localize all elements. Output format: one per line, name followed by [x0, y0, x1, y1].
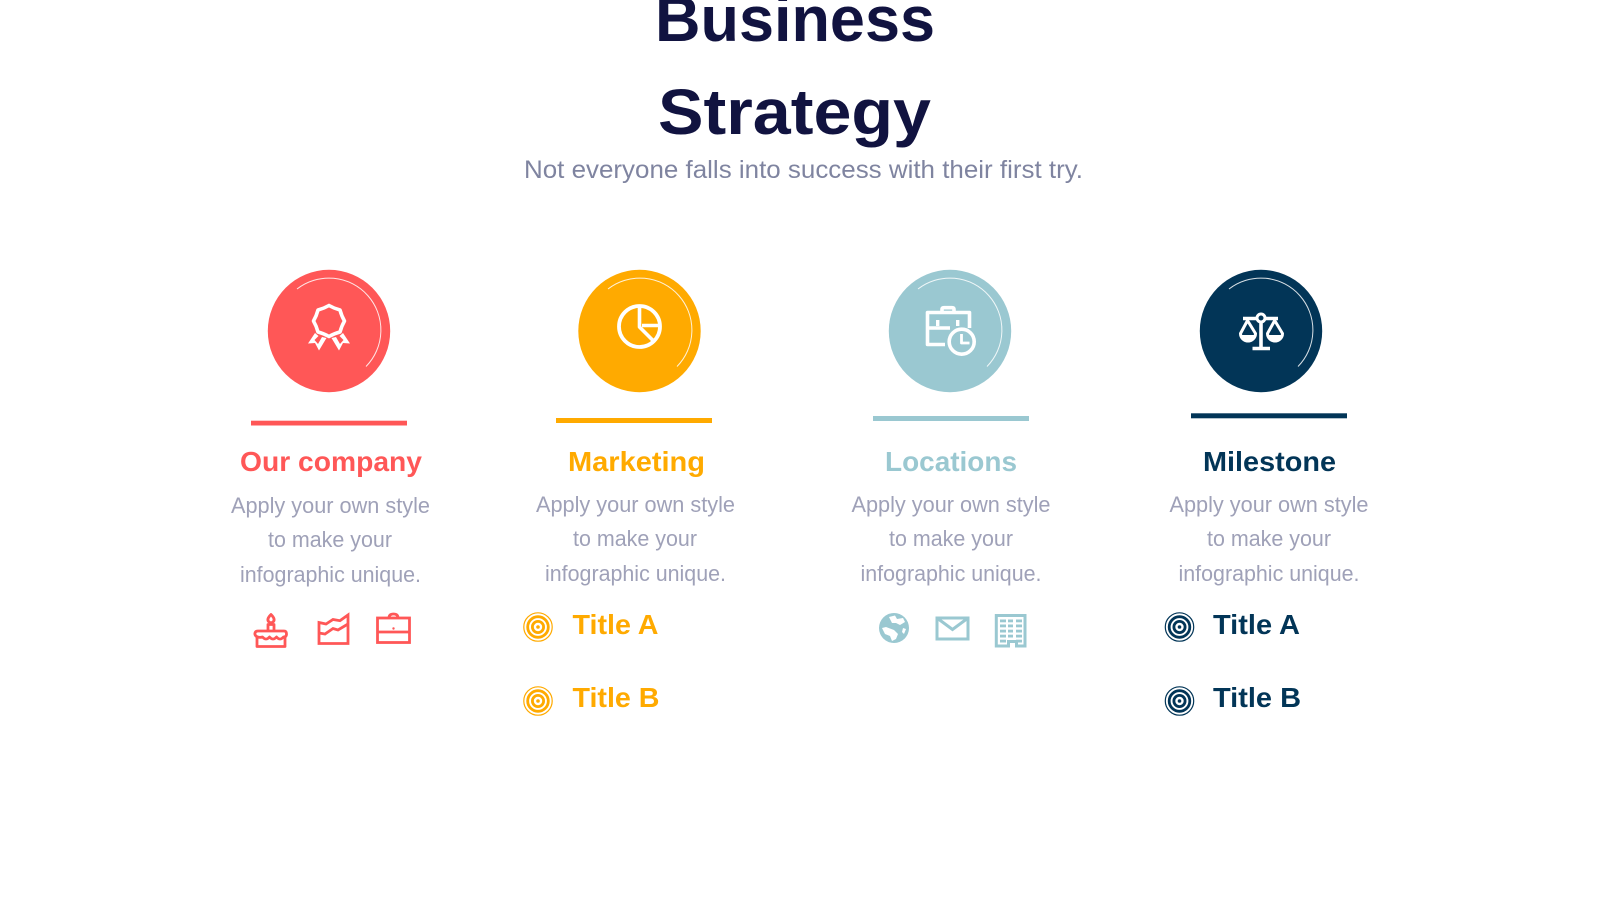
description: to make your [268, 527, 392, 552]
underline [251, 421, 407, 426]
heading: Our company [240, 446, 422, 477]
panel: milestone [1165, 270, 1368, 715]
panel: our company [231, 270, 430, 646]
description: infographic unique. [860, 561, 1042, 586]
icon: globe [879, 613, 909, 643]
list item: title B: Title B [572, 682, 660, 713]
description [536, 492, 735, 586]
description: infographic unique. [545, 561, 726, 586]
icon: balance scale in navy circle [1200, 270, 1322, 392]
underline [1191, 413, 1347, 418]
icon: cake [255, 614, 286, 646]
description: Apply your own style [231, 493, 430, 518]
description [231, 493, 430, 587]
icon: briefcase with clock in teal circle [889, 270, 1011, 392]
description: Apply your own style [1170, 492, 1368, 517]
description: Apply your own style [536, 492, 735, 517]
panel: locations [852, 270, 1050, 646]
heading: Locations [885, 446, 1017, 477]
description [852, 492, 1050, 586]
list item: title A [1165, 609, 1300, 641]
list item: title B [524, 682, 660, 715]
description: infographic unique. [1178, 561, 1360, 586]
icon: briefcase [378, 614, 410, 642]
list item: title A [524, 609, 658, 641]
icon: envelope [937, 618, 968, 639]
subtitle: Not everyone falls into success with their first try. [524, 156, 1083, 184]
icon: area chart [319, 615, 348, 644]
list item: title A: Title A [1213, 609, 1300, 640]
heading: Marketing [568, 446, 705, 477]
list item: title B [1165, 682, 1301, 715]
icon: pie chart in orange circle [578, 270, 701, 392]
description: to make your [889, 526, 1013, 551]
description: Apply your own style [852, 492, 1050, 517]
underline [556, 418, 712, 423]
panel: marketing [524, 270, 735, 715]
underline [873, 416, 1029, 421]
icon: rosette badge in red circle [268, 270, 390, 392]
title [655, 0, 935, 148]
description: infographic unique. [240, 562, 421, 587]
description: to make your [1207, 526, 1331, 551]
heading: Milestone [1203, 446, 1336, 477]
description [1170, 492, 1368, 586]
list item: title B: Title B [1213, 682, 1301, 713]
icon: office building [996, 616, 1025, 646]
list item: title A: Title A [572, 609, 658, 640]
description: to make your [573, 526, 697, 551]
title: Strategy [658, 76, 931, 148]
